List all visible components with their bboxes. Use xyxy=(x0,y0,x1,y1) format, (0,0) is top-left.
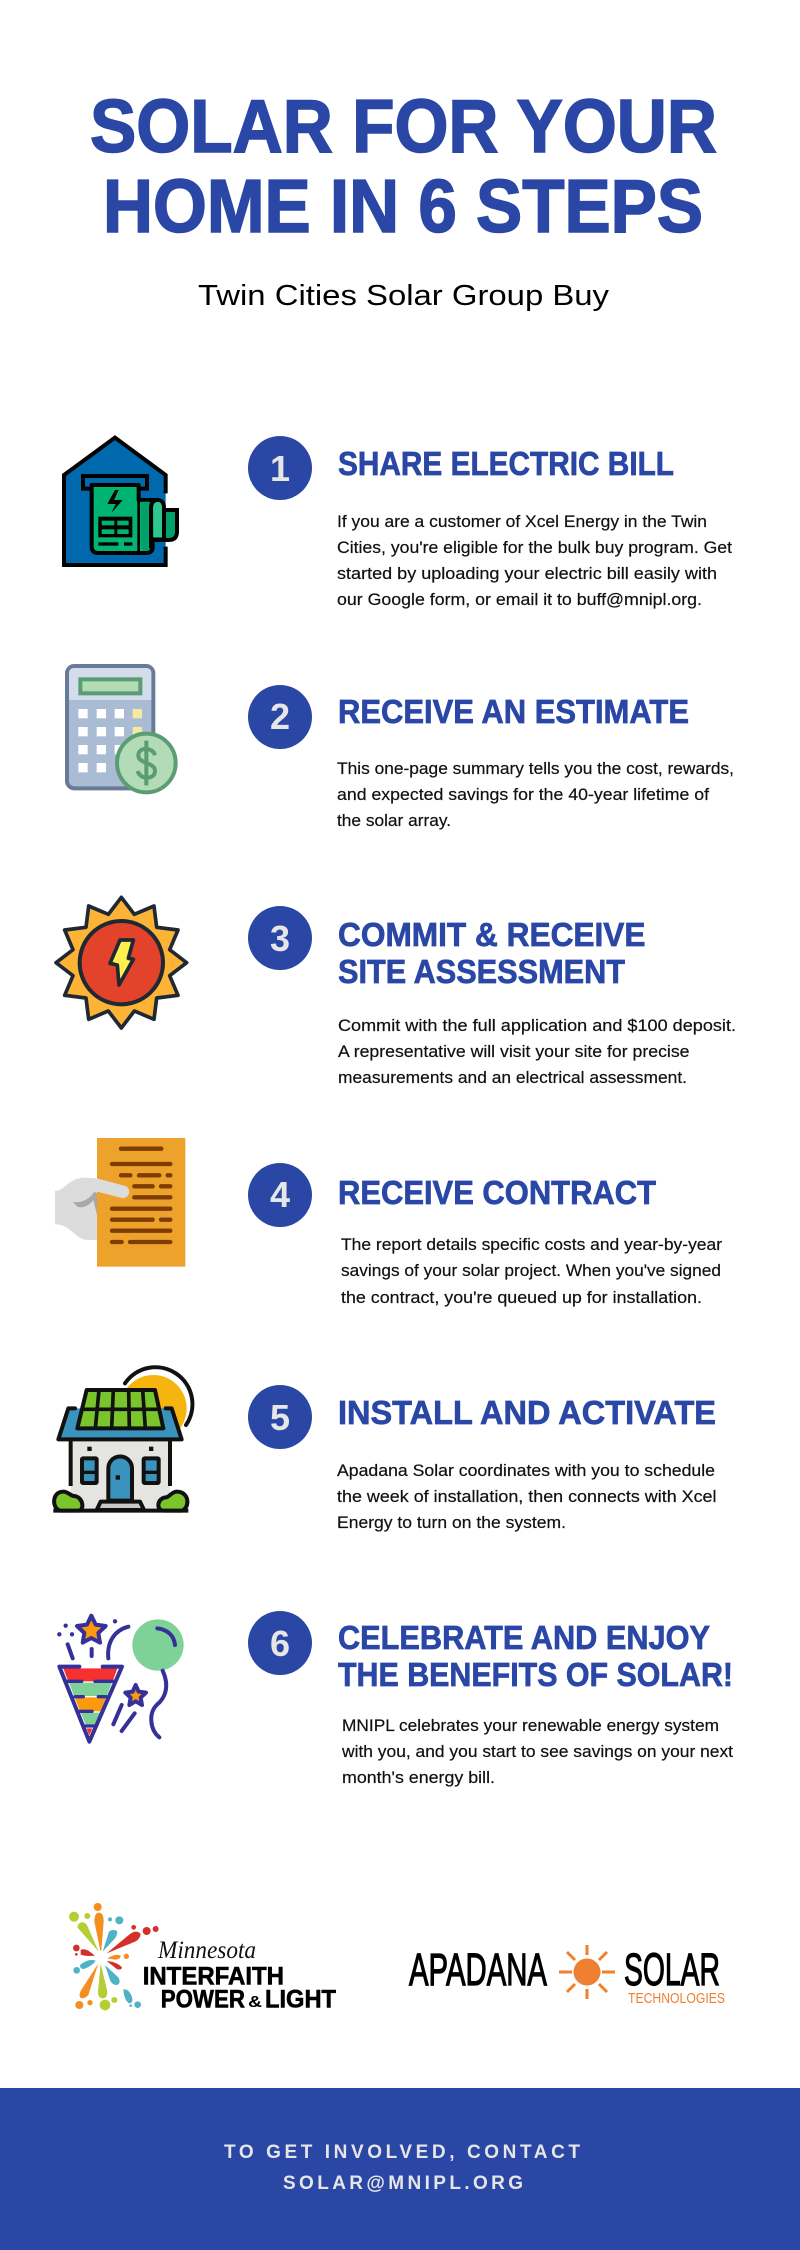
text block 6: month's energy bill. xyxy=(342,1769,495,1787)
number badge 3: 3 xyxy=(270,918,290,959)
text block 1: started by uploading your electric bill easily with xyxy=(337,565,717,583)
logo wordmark: LIGHT xyxy=(265,1986,336,2014)
logo wordmark: INTERFAITH xyxy=(143,1962,284,1990)
number badge 3 xyxy=(248,906,312,970)
title: SOLAR FOR YOUR xyxy=(90,84,717,168)
contact text xyxy=(224,2142,580,2194)
title xyxy=(90,84,717,248)
text block 4: savings of your solar project. When you've signed xyxy=(341,1262,721,1280)
number badge 4: 4 xyxy=(270,1174,290,1215)
number badge 2: 2 xyxy=(270,696,290,737)
subtitle: Twin Cities Solar Group Buy xyxy=(198,280,610,312)
heading 1: SHARE ELECTRIC BILL xyxy=(338,445,674,482)
text block 1: our Google form, or email it to buff@mnipl.org. xyxy=(337,591,702,609)
panel: step 2 receive an estimate xyxy=(67,666,734,830)
panel: step 3 commit and site assessment xyxy=(56,897,736,1087)
text block 1: Cities, you're eligible for the bulk buy program. Get xyxy=(337,539,732,557)
text block 3: A representative will visit your site for precise xyxy=(338,1043,690,1061)
icon: house with electric bill xyxy=(64,438,177,565)
text block 2: This one-page summary tells you the cost, rewards, xyxy=(337,760,734,778)
text block 3 xyxy=(338,1017,736,1087)
icon: sun with lightning bolt xyxy=(56,897,187,1028)
number badge 1: 1 xyxy=(270,448,290,489)
heading 4: RECEIVE CONTRACT xyxy=(338,1174,656,1211)
text block 2: and expected savings for the 40-year lifetime of xyxy=(337,786,709,804)
logo: Apadana Solar Technologies xyxy=(409,1944,725,2007)
heading 6: CELEBRATE AND ENJOY xyxy=(338,1619,710,1656)
heading 3 xyxy=(338,916,646,990)
text block 2 xyxy=(337,760,734,830)
number badge 6: 6 xyxy=(270,1623,290,1664)
text block 3: measurements and an electrical assessment. xyxy=(338,1069,687,1087)
text block 6 xyxy=(341,1717,733,1787)
heading 3: SITE ASSESSMENT xyxy=(338,953,625,990)
text block 4 xyxy=(341,1236,723,1307)
text block 4: the contract, you're queued up for installation. xyxy=(341,1289,702,1307)
icon: burst of colored petals xyxy=(69,1903,159,2010)
panel: step 1 share electric bill xyxy=(64,436,732,609)
heading 6 xyxy=(338,1619,733,1693)
heading 3: COMMIT & RECEIVE xyxy=(338,916,646,953)
logo wordmark xyxy=(143,1937,336,2014)
wordmark: Apadana: APADANA xyxy=(409,1944,547,1995)
text block 3: Commit with the full application and $100 deposit. xyxy=(338,1017,736,1035)
number badge 1 xyxy=(248,436,312,500)
title: HOME IN 6 STEPS xyxy=(103,164,703,248)
icon: party popper and balloon xyxy=(57,1616,184,1742)
wordmark: Solar: SOLAR xyxy=(624,1944,720,1995)
logo: Minnesota Interfaith Power & Light xyxy=(69,1903,336,2014)
text block 1: If you are a customer of Xcel Energy in the Twin xyxy=(337,513,707,531)
text block 6: MNIPL celebrates your renewable energy system xyxy=(342,1717,719,1735)
text block 5 xyxy=(337,1462,716,1532)
icon: orange sun xyxy=(559,1945,615,1999)
footer contact band xyxy=(0,2088,800,2250)
number badge 6 xyxy=(248,1611,312,1675)
contact text: TO GET INVOLVED, CONTACT xyxy=(224,2142,580,2163)
logo wordmark: & xyxy=(248,1994,263,2011)
logo wordmark: Minnesota xyxy=(157,1937,256,1964)
number badge 4 xyxy=(248,1163,312,1227)
text block 5: Apadana Solar coordinates with you to schedule xyxy=(337,1462,715,1480)
text block 1 xyxy=(337,513,732,609)
heading 6: THE BENEFITS OF SOLAR! xyxy=(338,1656,733,1693)
text block 6: with you, and you start to see savings on your next xyxy=(341,1743,733,1761)
number badge 5: 5 xyxy=(270,1397,290,1438)
panel: step 6 celebrate xyxy=(57,1611,733,1787)
contact text: SOLAR@MNIPL.ORG xyxy=(283,2173,523,2194)
text block 5: the week of installation, then connects with Xcel xyxy=(337,1488,716,1506)
panel: step 5 install and activate xyxy=(53,1367,716,1532)
icon: calculator with dollar coin xyxy=(67,666,176,792)
text block 5: Energy to turn on the system. xyxy=(337,1514,566,1532)
text block 4: The report details specific costs and year-by-year xyxy=(341,1236,723,1254)
panel: step 4 receive contract xyxy=(55,1138,723,1307)
text block 2: the solar array. xyxy=(337,812,451,830)
wordmark: Technologies: TECHNOLOGIES xyxy=(628,1990,725,2007)
logo wordmark: POWER xyxy=(161,1986,245,2014)
heading 2: RECEIVE AN ESTIMATE xyxy=(338,693,689,730)
icon: hand holding contract xyxy=(55,1138,185,1267)
number badge 2 xyxy=(248,685,312,749)
heading 5: INSTALL AND ACTIVATE xyxy=(338,1394,716,1431)
icon: house with solar panels xyxy=(53,1367,192,1511)
number badge 5 xyxy=(248,1385,312,1449)
